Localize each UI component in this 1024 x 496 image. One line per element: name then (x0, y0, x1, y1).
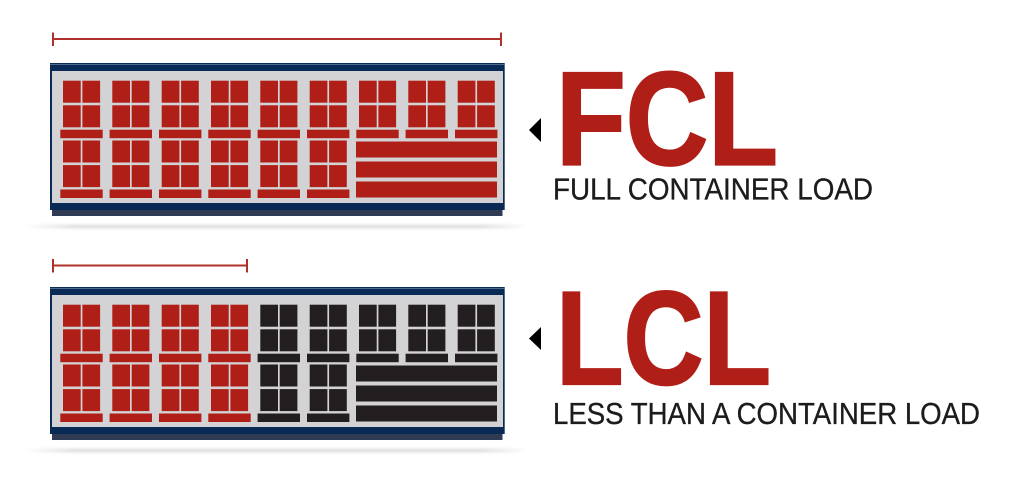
floor shadow (24, 224, 530, 228)
arrow: LCL pointer (529, 327, 541, 350)
ruler: FCL full container length (52, 32, 502, 46)
ruler: LCL partial container length (52, 259, 248, 272)
cargo: black units from other shipments (258, 305, 497, 422)
cargo: red long slabs (356, 142, 497, 198)
cargo: red units occupied by this shipment (60, 305, 251, 422)
container shell (50, 63, 505, 216)
cargo: black long slabs (356, 366, 497, 422)
panel: FCL container diagram (24, 32, 530, 228)
arrow: FCL pointer (529, 118, 541, 142)
cargo: upper row of red units (60, 81, 497, 138)
text: Full Container Load: FULL CONTAINER LOAD (553, 172, 873, 206)
heading: LCL: LCL (556, 265, 771, 413)
text: Less Than a Container Load: LESS THAN A CONTAINER LOAD (553, 396, 980, 431)
cargo: lower row of red units (60, 140, 349, 198)
container shell (50, 287, 505, 440)
heading: FCL: FCL (556, 46, 778, 194)
panel: LCL container diagram (24, 259, 530, 452)
floor shadow (24, 448, 530, 452)
